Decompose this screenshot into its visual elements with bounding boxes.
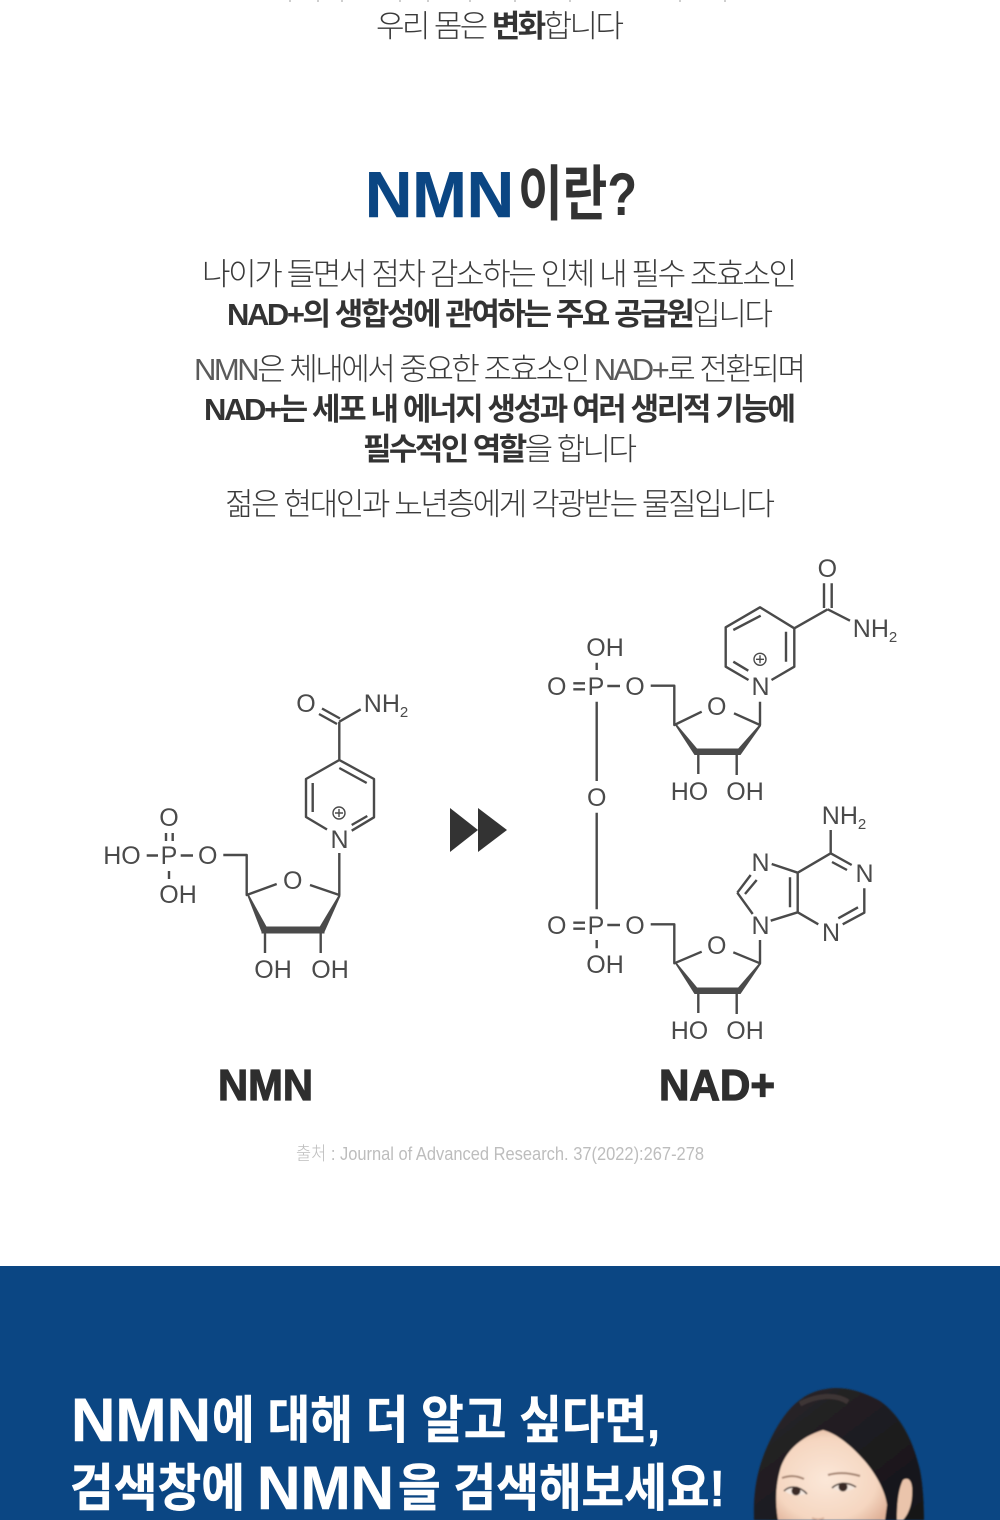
chart: NAD+ molecular structure: O <box>625 673 645 701</box>
description text block: 나이가 들면서 점차 감소하는 인체 내 필수 조효소인 <box>202 257 797 292</box>
chart: NMN molecular structure: 2 <box>400 704 408 721</box>
title: 이란? <box>518 161 637 228</box>
chart: NAD+ molecular structure: O <box>547 912 566 940</box>
chart: NAD+ molecular structure: O <box>547 673 566 701</box>
banner heading: 검색창에 <box>70 1460 245 1517</box>
chart: NAD+ molecular structure: OH <box>586 634 624 662</box>
chart: NAD+ molecular structure: N <box>822 919 840 947</box>
chart: NMN molecular structure: P <box>161 842 177 870</box>
banner heading: 을 검색해보세요! <box>398 1460 725 1517</box>
chart: NAD+ molecular structure: OH <box>726 1017 764 1045</box>
chart: NAD+ molecular structure: O <box>587 784 606 812</box>
description text block: 젊은 현대인과 노년층에게 각광받는 물질입니다 <box>225 487 775 522</box>
chart: NAD+ molecular structure: P <box>588 673 604 701</box>
banner heading: NMN <box>71 1386 211 1454</box>
chart: NAD+ molecular structure: O <box>707 932 726 960</box>
banner heading: NMN <box>257 1454 394 1520</box>
chart: NAD+ molecular structure: N <box>751 912 770 940</box>
chart: NAD+ molecular structure <box>547 555 897 1045</box>
chart: NMN molecular structure: OH <box>311 956 349 984</box>
chart: NAD+ molecular structure: N <box>855 860 874 888</box>
title: NMN <box>365 158 514 231</box>
chart: NMN molecular structure: O <box>296 690 316 718</box>
chart: NAD+ molecular structure: N <box>751 849 770 877</box>
description text block: 필수적인 역할을 합니다 <box>363 432 637 467</box>
description text block: NAD+는 세포 내 에너지 생성과 여러 생리적 기능에 <box>204 392 796 427</box>
intro closing line: 우리 몸은 변화합니다 <box>376 9 624 44</box>
chart: NAD+ molecular structure: O <box>707 693 726 721</box>
chart: NAD+ molecular structure: NH <box>853 615 889 643</box>
description text block <box>194 257 806 522</box>
description text block: NAD+의 생합성에 관여하는 주요 공급원입니다 <box>227 297 773 332</box>
chart: NAD+ molecular structure: OH <box>726 778 764 806</box>
chart: NMN molecular structure: OH <box>254 956 292 984</box>
chart: NAD+ molecular structure: HO <box>671 778 708 806</box>
portrait: smiling woman <box>754 1388 924 1520</box>
chart: NAD+ molecular structure: 2 <box>858 816 866 833</box>
banner heading: 에 대해 더 알고 싶다면, <box>212 1392 660 1449</box>
chart: NMN molecular structure: HO <box>103 842 141 870</box>
chart: NMN molecular structure: NH <box>364 690 400 718</box>
title <box>365 158 637 231</box>
chart: NAD+ molecular structure: OH <box>586 951 624 979</box>
label: NAD+: NAD+ <box>659 1061 775 1110</box>
chart: NAD+ molecular structure: HO <box>671 1017 708 1045</box>
chart: NAD+ molecular structure: O <box>625 912 645 940</box>
chart: NAD+ molecular structure: P <box>588 912 604 940</box>
banner heading <box>70 1386 725 1520</box>
chart: NMN molecular structure: O <box>283 867 302 895</box>
label: NMN: NMN <box>218 1061 313 1110</box>
chart: NAD+ molecular structure: N <box>751 673 770 701</box>
source citation: 출처 : Journal of Advanced Research. 37(2022):267-278 <box>296 1143 704 1164</box>
chart: NMN molecular structure: N <box>330 826 349 854</box>
chart: NAD+ molecular structure: O <box>818 555 837 583</box>
description text block: NMN은 체내에서 중요한 조효소인 NAD+로 전환되며 <box>194 352 806 387</box>
chart: NAD+ molecular structure: NH <box>822 802 858 830</box>
chart: NAD+ molecular structure: 2 <box>889 629 897 646</box>
chart: NMN molecular structure: OH <box>159 881 197 909</box>
chart: NMN molecular structure: O <box>198 842 217 870</box>
chart: NMN molecular structure <box>103 690 408 984</box>
panel: search banner <box>0 1266 1000 1520</box>
arrow: double right <box>450 808 507 852</box>
chart: NMN molecular structure: O <box>159 804 179 832</box>
